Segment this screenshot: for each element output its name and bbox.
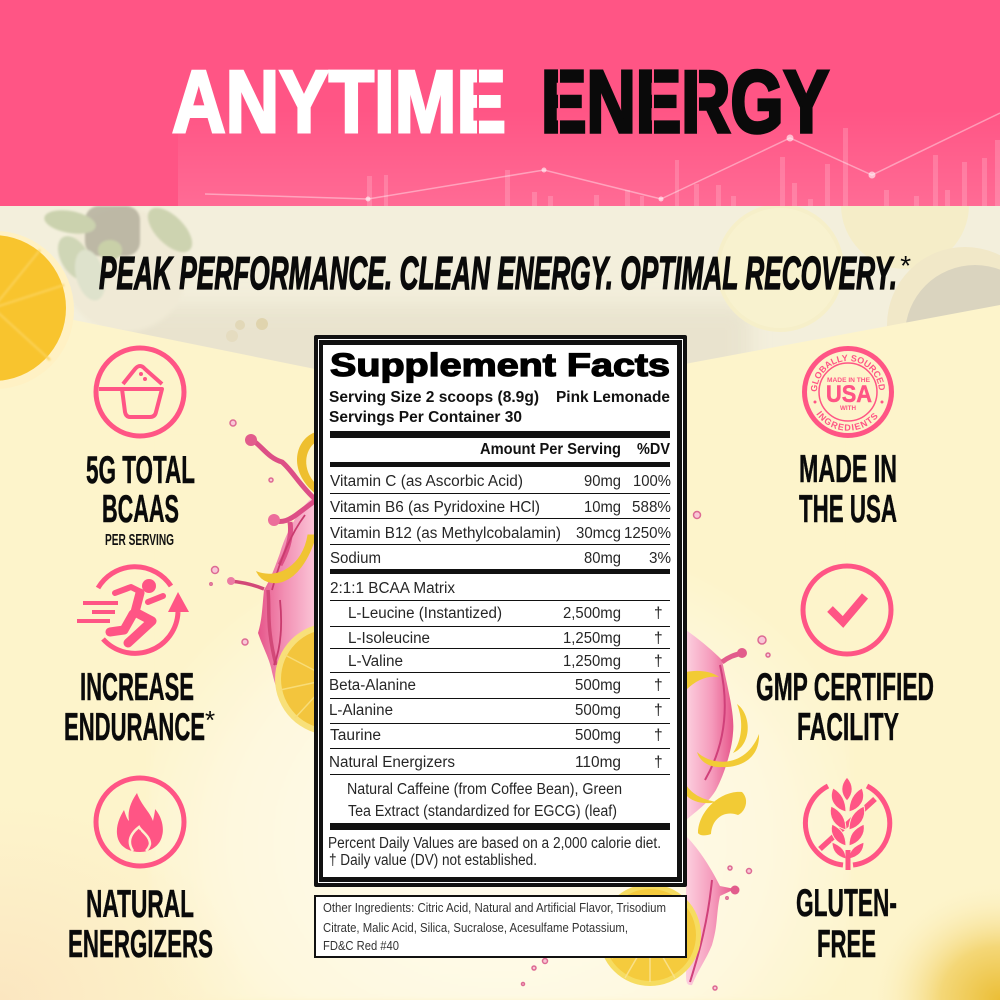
ingredient rows: † [654, 702, 663, 719]
title: ENERGY [541, 52, 829, 151]
icon: usa badge: WITH [840, 405, 856, 412]
header band [0, 0, 1000, 206]
vitamins rows: Sodium [330, 550, 381, 567]
icon: usa badge: MADE IN THE [827, 377, 871, 384]
ingredient rows: † [654, 630, 663, 647]
label footnote: † Daily value (DV) not established. [329, 852, 537, 869]
heading: 5g total bcaas: 5G TOTAL [86, 449, 195, 492]
table rules [330, 431, 670, 830]
splash left [210, 420, 387, 735]
ingredient rows: 110mg [575, 754, 621, 771]
vitamins rows: 588% [632, 499, 671, 516]
ingredient rows: † [654, 754, 663, 771]
heading: increase endurance: ENDURANCE [64, 706, 205, 749]
ingredient rows: 500mg [575, 727, 621, 744]
supplement facts label [314, 335, 687, 887]
splash right [522, 512, 770, 990]
table header: Amount Per Serving [480, 441, 621, 458]
ingredient rows: 1,250mg [563, 630, 621, 647]
heading: increase endurance: INCREASE [80, 666, 194, 709]
other ingredients box [315, 896, 686, 957]
icon: check mark [803, 566, 891, 654]
icon: usa badge [802, 346, 894, 438]
ingredient rows: L-Leucine (Instantized) [348, 605, 502, 622]
vitamins rows: 1250% [624, 525, 671, 542]
serving info: Serving Size 2 scoops (8.9g) [329, 389, 539, 406]
heading: gmp certified [756, 666, 934, 749]
benefit: made in the usa [799, 346, 897, 531]
pink droplets [210, 420, 273, 645]
heading: 5g total bcaas: BCAAS [102, 488, 179, 531]
table header: %DV [637, 441, 670, 458]
vitamins rows: 100% [633, 473, 671, 490]
icon: flame [96, 778, 184, 866]
heading: gluten free [796, 882, 897, 966]
heading: increase endurance [64, 666, 215, 749]
serving info: Servings Per Container 30 [329, 409, 522, 426]
icon: scoop [96, 348, 184, 436]
benefit: increase endurance [64, 567, 215, 749]
ingredient rows: Tea Extract (standardized for EGCG) (leaf) [348, 803, 617, 820]
ingredient rows: Taurine [330, 727, 381, 744]
vitamins rows: Vitamin B6 (as Pyridoxine HCl) [330, 499, 540, 516]
vitamins rows: Vitamin C (as Ascorbic Acid) [330, 473, 523, 490]
vitamins rows: 80mg [584, 550, 621, 567]
heading: made in the usa: MADE IN [799, 448, 897, 491]
vitamins rows: 30mcg [576, 525, 621, 542]
vitamins rows: 10mg [584, 499, 621, 516]
ingredient rows: L-Valine [348, 653, 403, 670]
benefit: natural energizers [68, 778, 213, 966]
heading: increase endurance: * [205, 705, 215, 735]
glowing trend line [205, 113, 1000, 202]
ingredient rows: L-Alanine [329, 702, 393, 719]
plant in pot [42, 200, 200, 304]
right pink droplets [522, 512, 770, 990]
heading: natural energizers: ENERGIZERS [68, 923, 213, 966]
label footnote [328, 835, 661, 869]
vitamins rows: 3% [649, 550, 671, 567]
benefit: 5g total bcaas [86, 348, 195, 549]
icon: crossed wheat [805, 777, 890, 870]
other ingredients box: Other Ingredients: Citric Acid, Natural and Artificial Flavor, Trisodium [323, 900, 666, 915]
heading: natural energizers [68, 883, 213, 966]
ingredient rows: 1,250mg [563, 653, 621, 670]
ingredient rows: 2:1:1 BCAA Matrix [330, 580, 455, 597]
heading: 5g total bcaas [86, 449, 195, 549]
right lemon peels [686, 671, 759, 835]
serving info [329, 389, 670, 426]
title [172, 52, 829, 151]
vitamins rows: 90mg [584, 473, 621, 490]
icon: usa badge: USA [826, 381, 872, 408]
title: ANYTIME [172, 52, 506, 151]
heading: natural energizers: NATURAL [86, 883, 194, 926]
ingredient rows: † [654, 727, 663, 744]
icon: usa badge: INGREDIENTS [816, 410, 878, 431]
ingredient rows: 500mg [575, 677, 621, 694]
rising bar chart motif [367, 128, 1000, 206]
heading: made in the usa: THE USA [799, 488, 897, 531]
ingredient rows: 2,500mg [563, 605, 621, 622]
ingredient rows: Natural Caffeine (from Coffee Bean), Green [347, 781, 622, 798]
benefit: gmp certified [756, 566, 934, 749]
ingredient rows: 500mg [575, 702, 621, 719]
other ingredients box: Citrate, Malic Acid, Silica, Sucralose, Acesulfame Potassium, [323, 920, 628, 935]
subheading: * [899, 250, 911, 281]
ingredient rows [329, 580, 663, 820]
lemon slice and peels [257, 432, 387, 735]
label heading: Supplement Facts [330, 347, 670, 383]
benefit: gluten free [796, 777, 897, 966]
ingredient rows: † [654, 605, 663, 622]
vitamins rows: Vitamin B12 (as Methylcobalamin) [330, 525, 561, 542]
heading: gmp certified: FACILITY [797, 706, 899, 749]
ingredient rows: Natural Energizers [329, 754, 455, 771]
ingredient rows: L-Isoleucine [348, 630, 430, 647]
heading: made in the usa [799, 448, 897, 531]
heading: gluten free: GLUTEN- [796, 882, 897, 925]
bottom lemon slice [599, 884, 701, 986]
ingredient rows: Beta-Alanine [329, 677, 416, 694]
ingredient rows: † [654, 677, 663, 694]
serving info: Pink Lemonade [556, 389, 670, 406]
icon: usa badge: GLOBALLY SOURCED [810, 354, 885, 392]
heading: gluten free: FREE [817, 923, 876, 966]
heading: 5g total bcaas: PER SERVING [105, 532, 174, 549]
vitamins rows [330, 473, 671, 567]
icon: runner [77, 567, 189, 653]
left lemon half [0, 231, 74, 389]
background: photo tabletop strip [0, 141, 1000, 406]
label footnote: Percent Daily Values are based on a 2,000 calorie diet. [328, 835, 661, 852]
ingredient rows: † [654, 653, 663, 670]
cream panel [0, 305, 1000, 1000]
other ingredients box: FD&C Red #40 [323, 938, 399, 953]
